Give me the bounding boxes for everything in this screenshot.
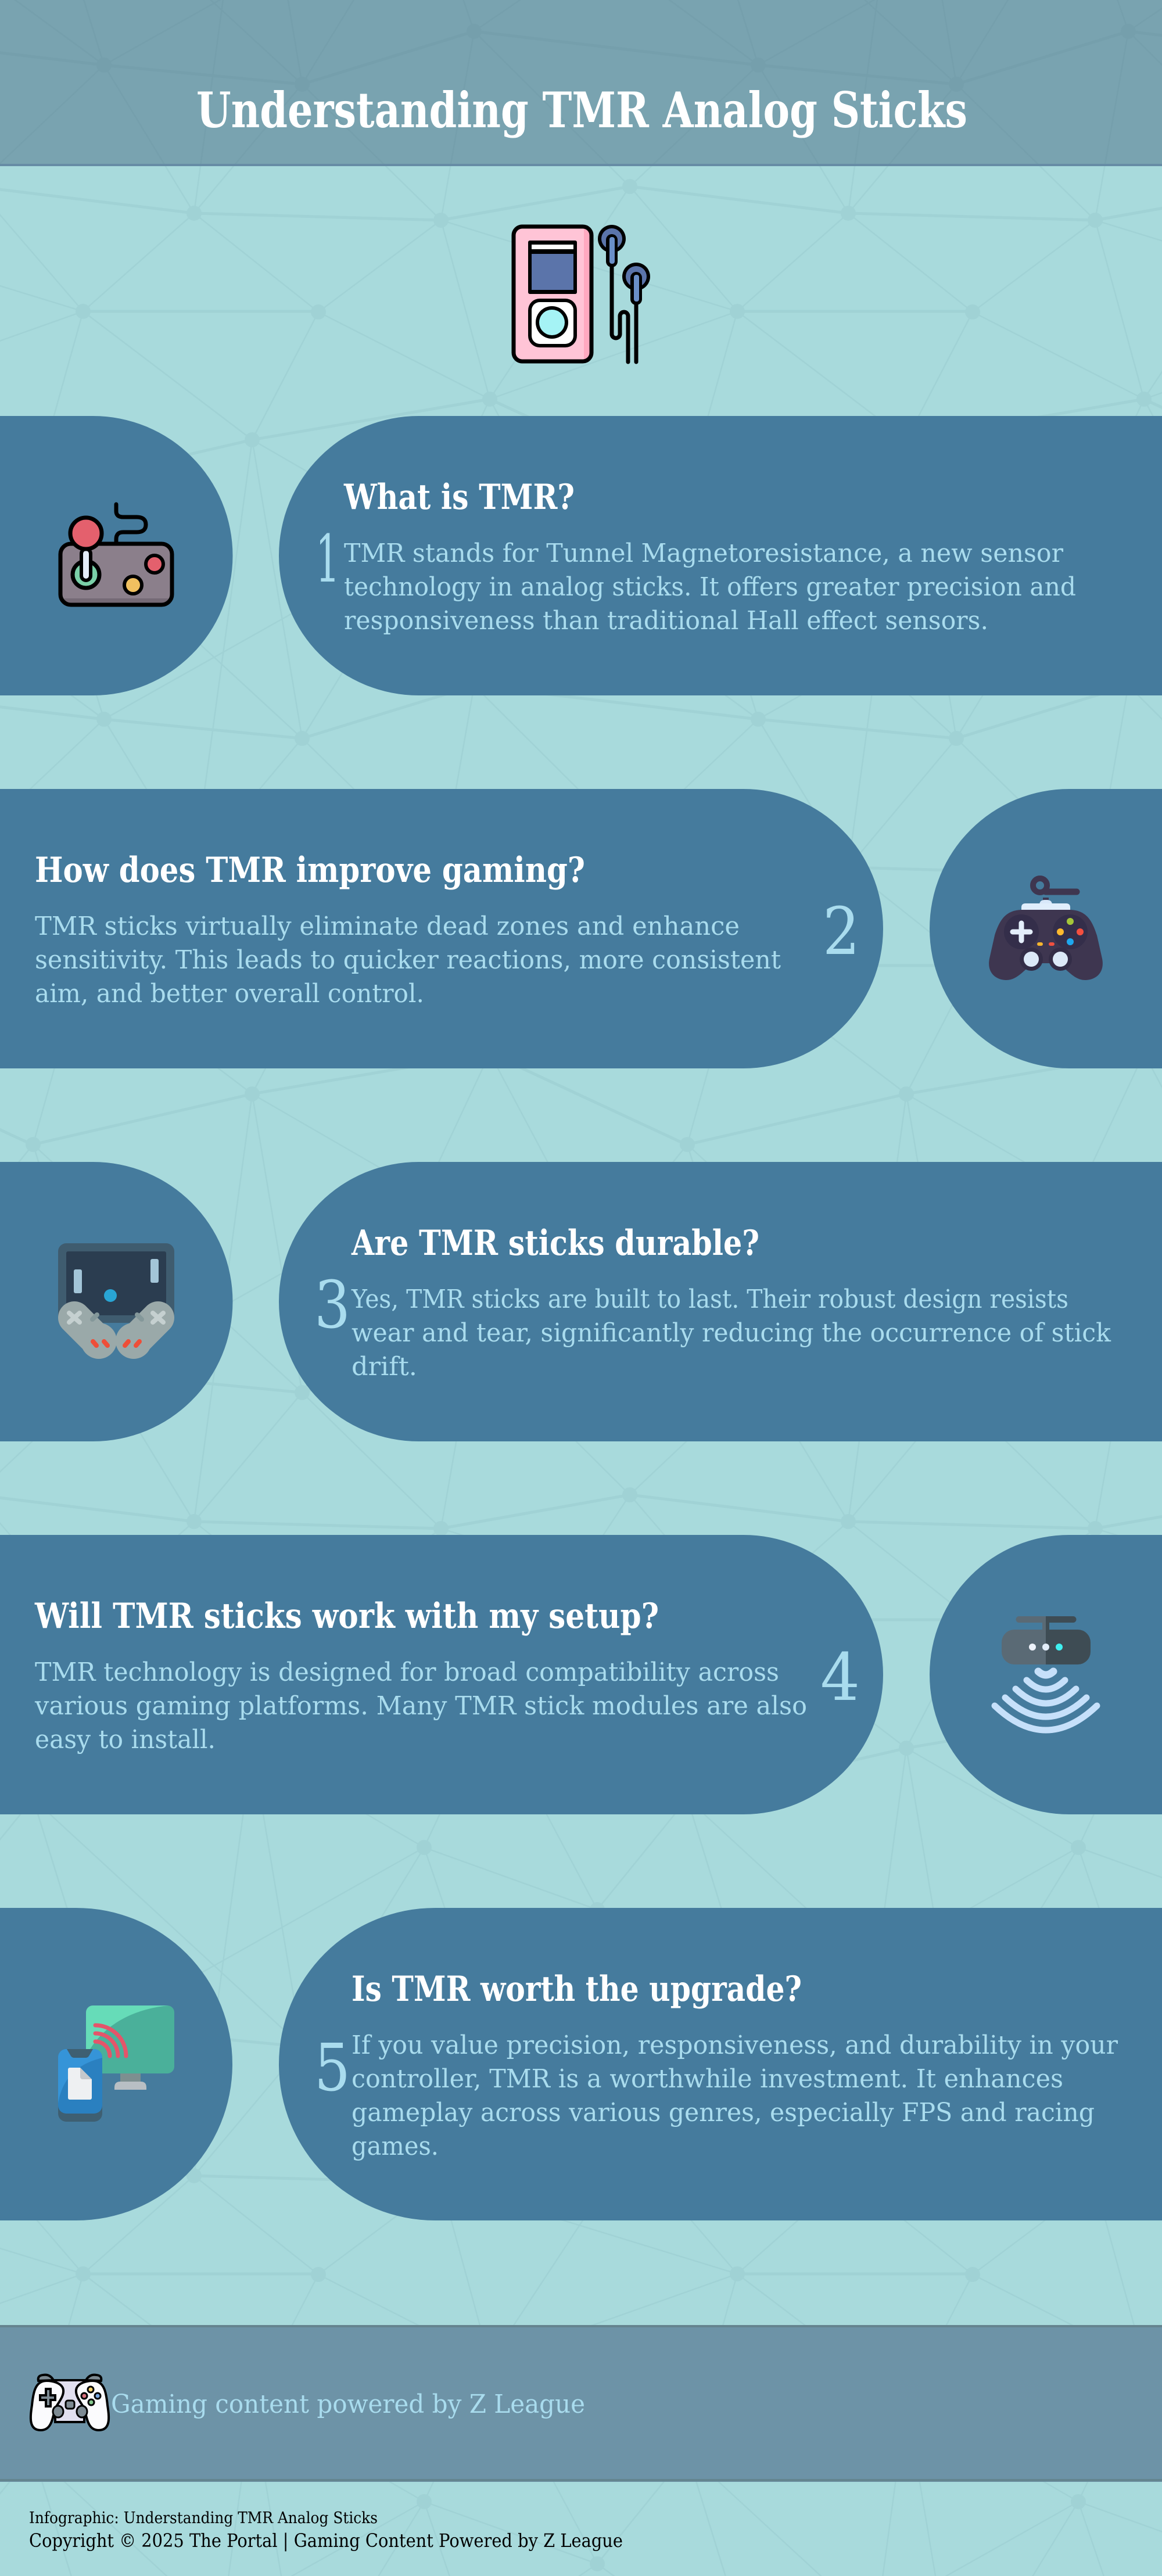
source credit line: Infographic: Understanding TMR Analog Sticks (29, 2509, 378, 2527)
panel: step 5 is TMR worth the upgrade (0, 1908, 1162, 2220)
copyright line: Copyright © 2025 The Portal | Gaming Content Powered by Z League (29, 2530, 623, 2552)
body text (35, 912, 781, 1009)
body text: If you value precision, responsiveness, and durability in your (352, 2030, 1118, 2060)
header band (0, 0, 1162, 166)
body text: responsiveness than traditional Hall effect sensors. (344, 606, 988, 636)
panel: step 1 what is TMR (0, 416, 1162, 695)
body text (344, 539, 1076, 636)
heading: What is TMR? (343, 477, 575, 518)
icon: arcade joystick (60, 504, 172, 605)
body text: sensitivity. This leads to quicker reactions, more consistent (35, 945, 781, 975)
body text: easy to install. (35, 1725, 216, 1755)
body text: TMR technology is designed for broad compatibility across (35, 1657, 779, 1687)
body text: aim, and better overall control. (35, 979, 424, 1009)
number: 5 (314, 2030, 350, 2106)
icon: wireless router (995, 1616, 1097, 1730)
icon: gamepad (989, 878, 1103, 980)
heading: Will TMR sticks work with my setup? (34, 1596, 659, 1637)
body text: TMR sticks virtually eliminate dead zones and enhance (35, 912, 740, 941)
body text (351, 1285, 1111, 1382)
heading: Is TMR worth the upgrade? (352, 1969, 802, 2010)
body text: Yes, TMR sticks are built to last. Their robust design resists (351, 1285, 1068, 1314)
icon: music player with earphones (514, 225, 650, 362)
body text: gameplay across various genres, especially FPS and racing (352, 2098, 1095, 2127)
body text: games. (352, 2132, 439, 2161)
panel: step 2 how does TMR improve gaming (0, 789, 1162, 1068)
body text (34, 1657, 807, 1755)
body text: controller, TMR is a worthwhile investment. It enhances (352, 2064, 1063, 2094)
title: Understanding TMR Analog Sticks (196, 81, 967, 139)
number: 4 (820, 1640, 860, 1716)
footer band (0, 2325, 1162, 2482)
number: 2 (823, 894, 860, 970)
heading: How does TMR improve gaming? (35, 850, 585, 891)
number: 3 (314, 1268, 350, 1343)
body text: various gaming platforms. Many TMR stick modules are also (34, 1691, 807, 1721)
panel: step 4 will TMR sticks work with my setup (0, 1535, 1162, 1814)
body text: TMR stands for Tunnel Magnetoresistance, a new sensor (344, 539, 1064, 568)
icon: retro game console (58, 1243, 174, 1359)
icon: phone casting to monitor (58, 2005, 174, 2122)
panel: step 3 are TMR sticks durable (0, 1162, 1162, 1441)
number: 1 (315, 522, 340, 597)
body text: drift. (352, 1352, 417, 1382)
body text (352, 2030, 1118, 2161)
body text: technology in analog sticks. It offers greater precision and (344, 572, 1076, 602)
icon: white game controller (31, 2375, 109, 2430)
body text: wear and tear, significantly reducing the occurrence of stick (352, 1318, 1111, 1348)
heading: Are TMR sticks durable? (351, 1223, 759, 1264)
footer tagline: Gaming content powered by Z League (111, 2390, 585, 2419)
